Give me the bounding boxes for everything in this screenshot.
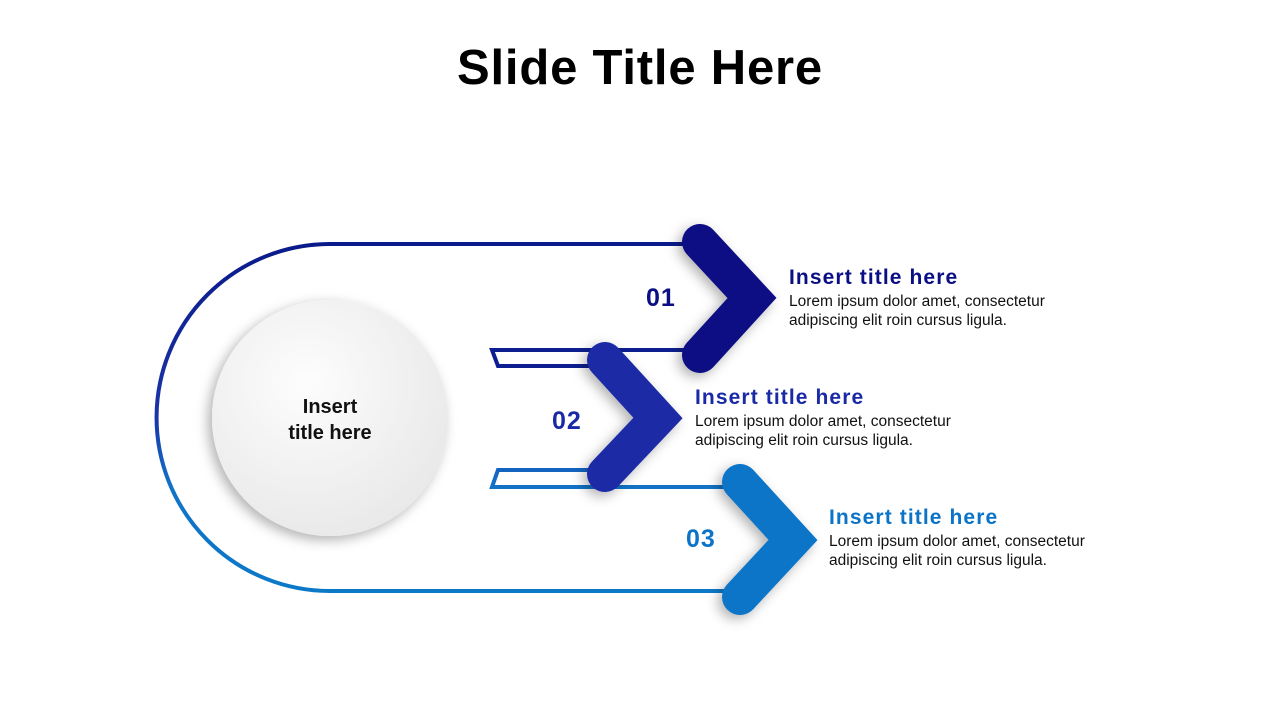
text 01: Lorem ipsum dolor amet, consectetur [789, 293, 1045, 310]
circle [212, 300, 448, 536]
text 03: adipiscing elit roin cursus ligula. [829, 552, 1047, 569]
text 02: adipiscing elit roin cursus ligula. [695, 432, 913, 449]
number 01: 01 [646, 284, 676, 312]
outer loop [157, 244, 740, 591]
text 03: Lorem ipsum dolor amet, consectetur [829, 533, 1085, 550]
chevron 02 [605, 360, 658, 474]
text 01: adipiscing elit roin cursus ligula. [789, 312, 1007, 329]
chevron 03 [740, 482, 793, 597]
number 02: 02 [552, 407, 582, 435]
text 03: Insert title here [829, 506, 998, 529]
text 02: Insert title here [695, 386, 864, 409]
title: Slide Title Here [457, 41, 823, 95]
chevron 01 [700, 242, 752, 355]
text 01: Insert title here [789, 266, 958, 289]
text 03 [829, 506, 1085, 569]
circle label [288, 396, 372, 444]
text 02 [695, 386, 951, 449]
text 02: Lorem ipsum dolor amet, consectetur [695, 413, 951, 430]
number 03: 03 [686, 525, 716, 553]
circle label: Insert [303, 396, 357, 418]
circle label: title here [288, 422, 372, 444]
text 01 [789, 266, 1045, 329]
